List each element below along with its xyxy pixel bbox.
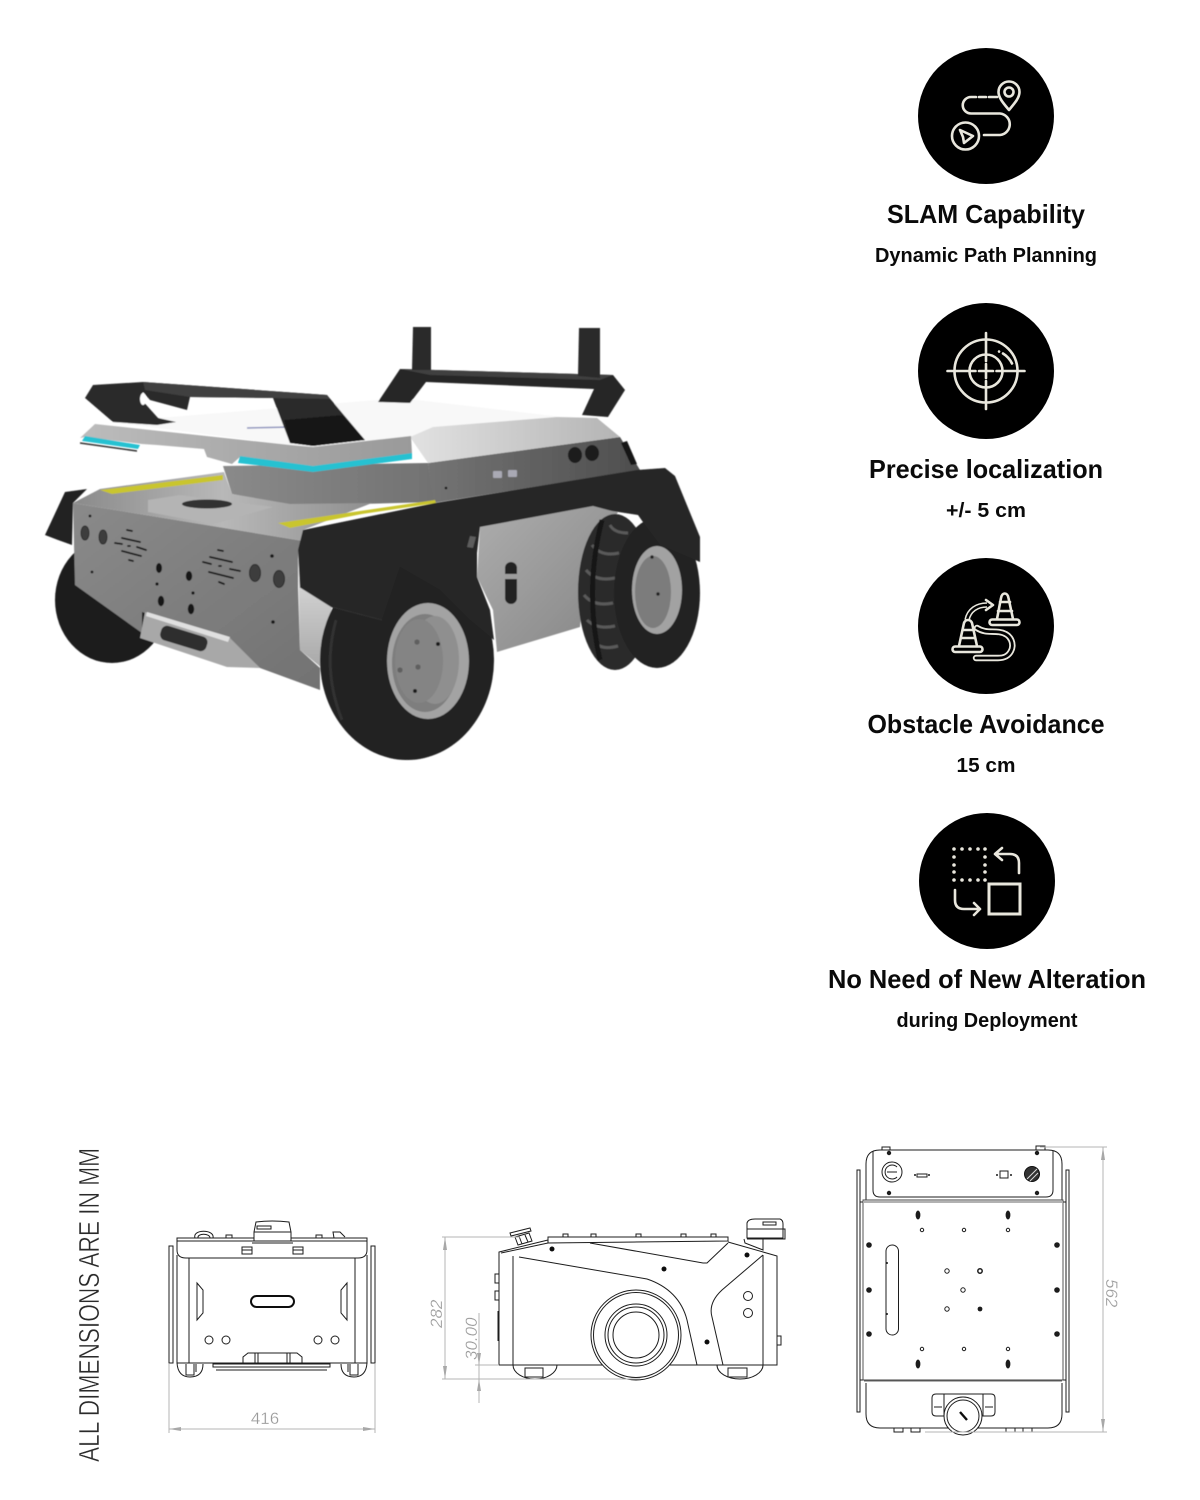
- outer rails: [857, 1170, 1069, 1412]
- drawing: front view: [169, 1221, 375, 1433]
- body outline: [499, 1240, 777, 1365]
- yellow stripe rear: [100, 475, 223, 494]
- white panel by front wheel: [298, 542, 332, 668]
- side wheel: [591, 1290, 681, 1380]
- carry slot: [251, 1296, 294, 1307]
- dial: [1024, 1166, 1040, 1182]
- heading: Precise localization: [869, 454, 1103, 484]
- rear handle: [378, 327, 625, 417]
- subheading: 15 cm: [956, 754, 1016, 777]
- lower deck: [73, 472, 436, 541]
- dimension 416: [169, 1364, 375, 1433]
- lower handle and bar: [243, 1353, 302, 1363]
- connectors: [917, 1171, 1008, 1178]
- subheading: during Deployment: [896, 1009, 1078, 1032]
- dimension 282 and 30.00: 282: [427, 1299, 446, 1329]
- left fender: [45, 489, 87, 545]
- side panel with slot: [477, 505, 618, 652]
- feature: no alteration needed: [828, 813, 1146, 1032]
- heading: Obstacle Avoidance: [868, 709, 1104, 739]
- body outline: [177, 1255, 367, 1363]
- front section: [866, 1383, 1062, 1428]
- long slot: [886, 1245, 898, 1335]
- icon: relocate squares: [919, 813, 1055, 949]
- dimension 562: [925, 1147, 1121, 1432]
- icon: route with pin: [918, 48, 1054, 184]
- drawing: side view: [427, 1219, 785, 1403]
- dark fenders and body band: [298, 468, 700, 640]
- front handle: [85, 382, 365, 446]
- trapezoid windows: [197, 1283, 347, 1320]
- front estop with brackets: [932, 1394, 995, 1435]
- vertical units note: ALL DIMENSIONS ARE IN MM: [74, 1148, 106, 1462]
- cyan light strip left: [82, 436, 140, 449]
- sensor circles: [205, 1336, 339, 1344]
- side rails: [169, 1246, 375, 1363]
- vent right: [203, 550, 240, 584]
- front camera housing: [140, 612, 260, 668]
- subheading: Dynamic Path Planning: [875, 244, 1097, 267]
- heading: SLAM Capability: [887, 199, 1086, 229]
- vent left: [115, 530, 146, 561]
- top plate lip: [80, 424, 412, 467]
- turret sensor: [254, 1221, 291, 1241]
- sensor post right: [578, 328, 600, 378]
- power switch: [882, 1162, 902, 1182]
- upper body side wall: [223, 437, 640, 506]
- front wheel: [320, 560, 494, 760]
- dimension 282 and 30.00: [427, 1237, 640, 1403]
- rear section: [866, 1150, 1062, 1200]
- top plate right band: [410, 417, 620, 463]
- front wheel rim: [387, 603, 469, 719]
- side buttons: [495, 1274, 499, 1341]
- mounting holes: [866, 1151, 1060, 1368]
- top plate: [177, 1238, 367, 1258]
- front panel: [73, 503, 320, 690]
- robot product render: [45, 327, 700, 760]
- sensor post left: [412, 327, 431, 370]
- dimension 282 and 30.00: 30.00: [462, 1317, 481, 1360]
- emergency stop: [510, 1228, 532, 1245]
- top handle and tabs: [195, 1231, 345, 1238]
- cyan light strip right: [238, 453, 412, 472]
- top plate: [80, 398, 620, 472]
- heading: No Need of New Alteration: [828, 964, 1146, 994]
- rear left wheel: [55, 537, 169, 663]
- middle plate: [863, 1200, 1063, 1380]
- icon: traffic cones and path: [918, 558, 1054, 694]
- feature: precise localization: [869, 303, 1103, 522]
- dimension 562: 562: [1102, 1279, 1121, 1308]
- side sensor: [744, 1219, 785, 1250]
- casters: [177, 1363, 367, 1377]
- feature: obstacle avoidance: [868, 558, 1104, 777]
- drawing: top view: [857, 1146, 1121, 1435]
- dimension 416: 416: [251, 1409, 279, 1428]
- front holes: [81, 526, 284, 588]
- yellow stripe front: [278, 500, 436, 528]
- bolts and circles: [550, 1246, 752, 1344]
- side panel contours: [519, 1243, 763, 1365]
- subheading: +/- 5 cm: [946, 499, 1026, 522]
- casters: [513, 1365, 763, 1379]
- top plate: [548, 1237, 728, 1243]
- deck plate with hole: [148, 495, 273, 523]
- icon: crosshair target: [918, 303, 1054, 439]
- rear right wheel: [578, 514, 700, 670]
- feature: SLAM capability: [875, 48, 1097, 267]
